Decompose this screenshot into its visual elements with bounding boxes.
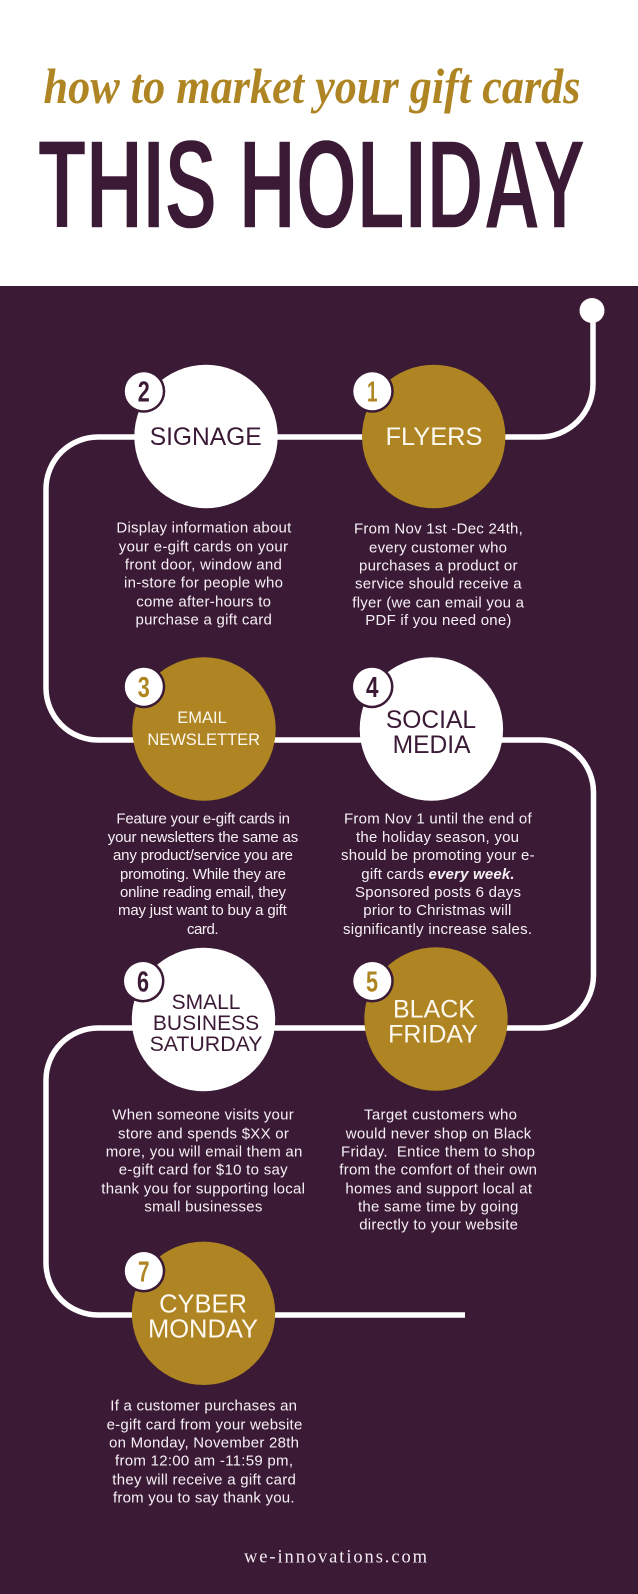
step 4 text: gift cards every week. xyxy=(361,866,515,883)
step 3 text: promoting. While they are xyxy=(120,866,286,883)
step 2: signage xyxy=(116,365,292,628)
step 2 text: come after-hours to xyxy=(136,593,271,610)
step 7 text: If a customer purchases an xyxy=(110,1397,297,1414)
step 2 text: purchase a gift card xyxy=(136,611,272,628)
header panel xyxy=(0,0,638,286)
step 5 label xyxy=(388,995,478,1049)
step 1 badge xyxy=(351,370,394,413)
step 3 badge: 3 xyxy=(138,672,150,704)
step 2 text: Display information about xyxy=(116,519,292,536)
step 6 label xyxy=(150,991,262,1056)
step 4 badge: 4 xyxy=(366,672,378,704)
footer website: we-innovations.com xyxy=(244,1548,428,1568)
step 2 badge xyxy=(122,370,165,413)
step 7 text xyxy=(107,1397,302,1506)
step 1 text: purchases a product or xyxy=(359,558,518,575)
step 5 badge: 5 xyxy=(366,966,378,998)
step 3 text: card. xyxy=(187,921,218,938)
step 6 badge: 6 xyxy=(137,966,149,998)
step 4 label: SOCIAL xyxy=(386,707,476,734)
step 5 text: directly to your website xyxy=(359,1216,518,1233)
step 3 label xyxy=(147,709,260,749)
step 6 label: SATURDAY xyxy=(150,1032,262,1056)
step 1 text: flyer (we can email you a xyxy=(352,594,525,611)
step 2 badge: 2 xyxy=(138,377,150,409)
step 5 text: Target customers who xyxy=(364,1106,517,1123)
step 3 text xyxy=(108,810,298,938)
step 4 text: From Nov 1 until the end of xyxy=(344,810,533,827)
step 4 text: should be promoting your e- xyxy=(341,847,535,864)
step 6: small business saturday xyxy=(101,948,305,1215)
step 7 text: e-gift card from your website xyxy=(107,1416,302,1433)
step 4 text xyxy=(341,810,535,938)
step 7 label: CYBER xyxy=(159,1291,247,1319)
step 5 label: BLACK xyxy=(393,995,475,1023)
step 4: social media xyxy=(341,657,535,938)
step 4 text: Sponsored posts 6 days xyxy=(355,884,521,901)
step 1 text xyxy=(352,520,525,629)
step 2 text: your e-gift cards on your xyxy=(119,539,288,556)
step 3 badge xyxy=(122,665,165,708)
start dot xyxy=(580,298,604,323)
step 4 text: significantly increase sales. xyxy=(343,921,532,938)
step 7: cyber monday xyxy=(107,1242,302,1506)
step 6 text: more, you will email them an xyxy=(106,1143,302,1160)
step 7 badge: 7 xyxy=(138,1256,150,1288)
step 4 text: the holiday season, you xyxy=(356,829,519,846)
step 5 text: from the comfort of their own xyxy=(339,1161,537,1178)
step 1: flyers xyxy=(351,365,525,629)
step 3 text: may just want to buy a gift xyxy=(118,902,288,919)
step 2 text: front door, window and xyxy=(125,556,282,573)
step 6 text xyxy=(101,1106,305,1215)
step 3 label: EMAIL xyxy=(177,709,227,727)
step 2 label: SIGNAGE xyxy=(150,423,262,451)
step 5: black friday xyxy=(339,947,537,1233)
step 6 text: small businesses xyxy=(144,1198,262,1215)
step 1 text: From Nov 1st -Dec 24th, xyxy=(354,520,523,537)
step 7 text: from 12:00 am -11:59 pm, xyxy=(115,1452,293,1469)
step 1 text: PDF if you need one) xyxy=(365,612,511,629)
step 5 text: the same time by going xyxy=(358,1198,518,1215)
step 3: email newsletter xyxy=(108,657,298,938)
step 7 text: from you to say thank you. xyxy=(113,1489,294,1506)
step 6 label: SMALL xyxy=(172,991,240,1014)
step 6 text: When someone visits your xyxy=(112,1106,294,1123)
step 4 badge xyxy=(350,665,394,708)
step 1 label: FLYERS xyxy=(386,423,482,451)
step 7 text: on Monday, November 28th xyxy=(109,1434,299,1451)
step 6 text: store and spends $XX or xyxy=(118,1125,289,1142)
step 1 text: every customer who xyxy=(369,540,507,557)
step 7 label xyxy=(148,1291,258,1344)
step 6 text: thank you for supporting local xyxy=(101,1180,305,1197)
step 5 text: would never shop on Black xyxy=(345,1125,532,1142)
step 3 label: NEWSLETTER xyxy=(147,731,260,749)
step 7 badge xyxy=(122,1250,165,1292)
step 5 label: FRIDAY xyxy=(388,1021,478,1049)
step 3 text: any product/service you are xyxy=(113,847,293,864)
subtitle script: how to market your gift cards xyxy=(44,58,580,114)
step 7 label: MONDAY xyxy=(148,1316,258,1344)
timeline path xyxy=(46,298,604,1315)
step 5 badge xyxy=(351,960,394,1002)
step 5 text xyxy=(339,1106,537,1233)
step 1 badge: 1 xyxy=(367,377,378,409)
step 7 text: they will receive a gift card xyxy=(112,1471,296,1488)
step 5 text: Friday. Entice them to shop xyxy=(341,1143,535,1160)
step 4 text: prior to Christmas will xyxy=(363,902,511,919)
step 6 text: e-gift card for $10 to say xyxy=(119,1161,288,1178)
step 2 text xyxy=(116,519,292,628)
step 2 text: in-store for people who xyxy=(124,574,283,591)
step 5 text: homes and support local at xyxy=(345,1180,533,1197)
step 6 label: BUSINESS xyxy=(153,1012,259,1035)
step 4 label: MEDIA xyxy=(393,732,471,759)
step 3 text: your newsletters the same as xyxy=(108,829,298,846)
step 3 text: Feature your e-gift cards in xyxy=(116,810,290,827)
step 6 badge xyxy=(122,960,164,1002)
step 4 label xyxy=(386,707,476,759)
step 1 text: service should receive a xyxy=(355,576,522,593)
step 3 text: online reading email, they xyxy=(120,884,286,901)
